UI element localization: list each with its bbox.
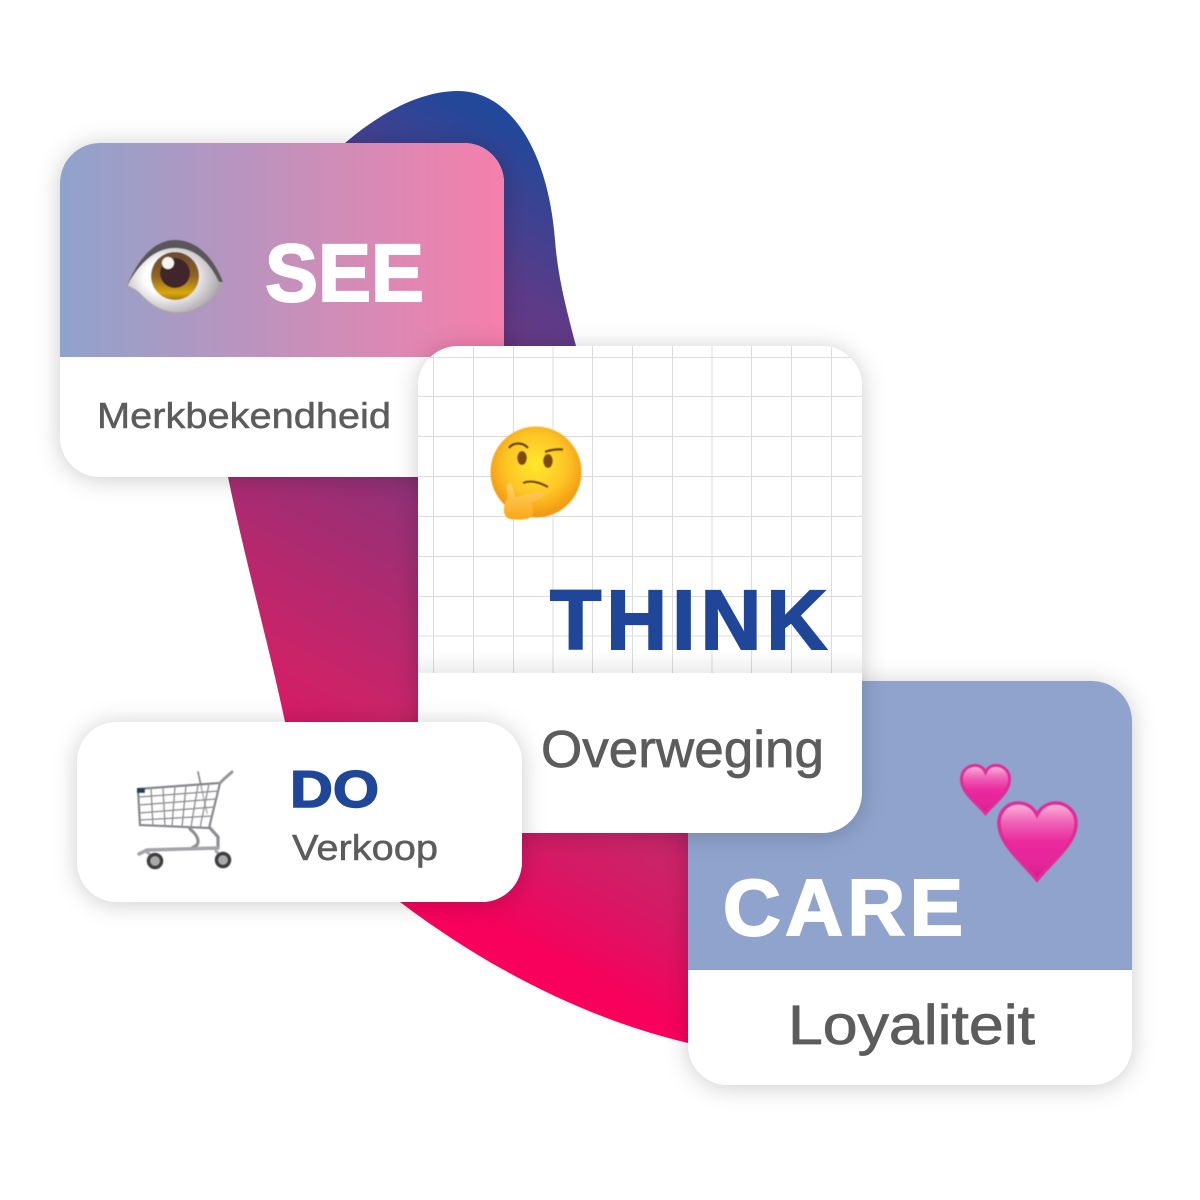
icon: shopping cart xyxy=(137,772,232,868)
SEE card gradient header xyxy=(60,143,504,357)
DO heading: DO xyxy=(290,761,379,819)
background blob xyxy=(228,91,688,1043)
CARE card header xyxy=(688,681,1132,970)
SEE heading: SEE xyxy=(265,228,424,319)
THINK heading: THINK xyxy=(550,573,827,667)
card: SEE xyxy=(60,143,504,477)
THINK label: Overweging xyxy=(541,721,824,779)
icon: thinking face xyxy=(490,426,582,520)
SEE label: Merkbekendheid xyxy=(97,395,391,436)
icon: eye xyxy=(127,240,223,313)
CARE label: Loyaliteit xyxy=(788,993,1035,1056)
card: DO xyxy=(77,722,522,902)
THINK grid pattern xyxy=(418,346,862,673)
DO label: Verkoop xyxy=(292,827,438,868)
card: THINK xyxy=(418,346,862,833)
icon: hearts xyxy=(962,766,1076,880)
CARE heading: CARE xyxy=(723,863,963,952)
card: CARE xyxy=(688,681,1132,1085)
